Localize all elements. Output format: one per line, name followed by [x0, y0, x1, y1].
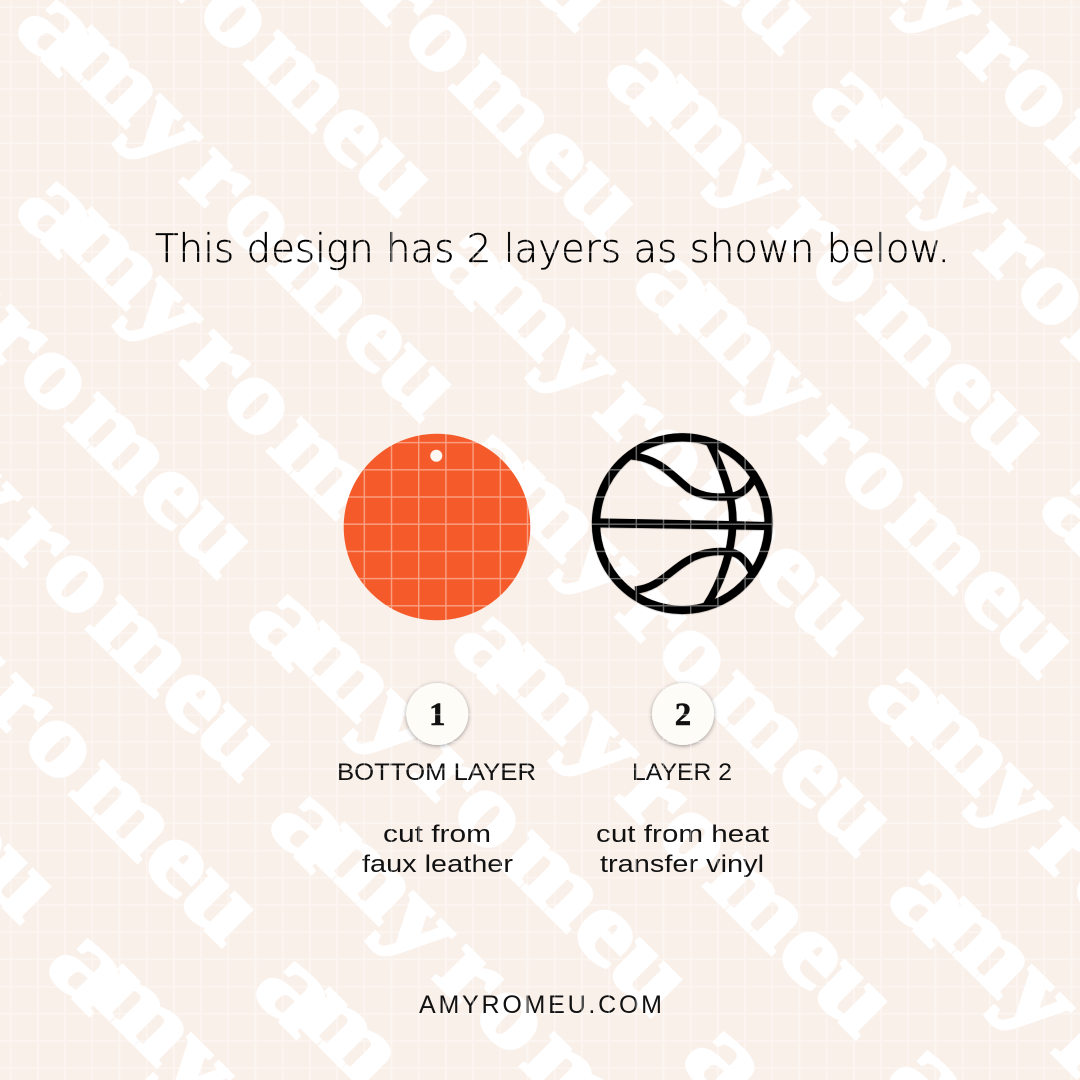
watermark pattern: amyromeu: a — [429, 574, 568, 713]
watermark pattern: amyromeu: a — [406, 191, 545, 330]
watermark pattern: amyromeu: a — [865, 828, 1004, 967]
number badge 2: 2 — [675, 697, 691, 733]
number badge 2 — [652, 683, 714, 745]
label: bottom layer: BOTTOM LAYER — [337, 759, 536, 786]
watermark pattern: amyromeu: myromeu — [42, 177, 485, 620]
watermark pattern: amyromeu: myromeu — [478, 430, 921, 873]
watermark pattern: amyromeu: myromeu — [478, 612, 921, 1055]
watermark pattern: amyromeu: a — [24, 896, 163, 1035]
label: layer 2: LAYER 2 — [632, 759, 732, 786]
number badge 1: 1 — [429, 697, 446, 733]
watermark pattern: amyromeu: myromeu — [631, 44, 1074, 487]
watermark pattern: amyromeu: a — [224, 552, 363, 691]
watermark pattern: amyromeu: a — [582, 6, 721, 145]
watermark pattern: amyromeu: a — [246, 754, 385, 893]
description: layer 2 material: cut from heat — [596, 821, 769, 848]
watermark pattern: amyromeu: a — [611, 214, 750, 353]
description: bottom layer material — [362, 821, 513, 878]
watermark pattern: amyromeu: a — [787, 29, 926, 168]
watermark pattern: amyromeu: myromeu — [273, 590, 716, 1033]
watermark pattern: amyromeu: a — [429, 392, 568, 531]
watermark pattern: amyromeu: myromeu — [42, 0, 485, 438]
description: layer 2 material — [596, 821, 769, 878]
number badge 1 — [406, 683, 468, 745]
watermark pattern: amyromeu: a — [231, 919, 370, 1058]
description: bottom layer material: cut from — [383, 821, 491, 848]
icon: basketball layer 2 — [596, 437, 769, 610]
website footer: AMYROMEU.COM — [419, 991, 662, 1019]
description: bottom layer material: faux leather — [362, 851, 513, 878]
description: layer 2 material: transfer vinyl — [600, 851, 764, 878]
watermark pattern: amyromeu: myromeu — [455, 229, 898, 672]
watermark pattern: amyromeu: a — [843, 626, 982, 765]
title: This design has 2 layers as shown below. — [155, 227, 950, 272]
icon: orange bottom layer circle — [344, 434, 530, 620]
